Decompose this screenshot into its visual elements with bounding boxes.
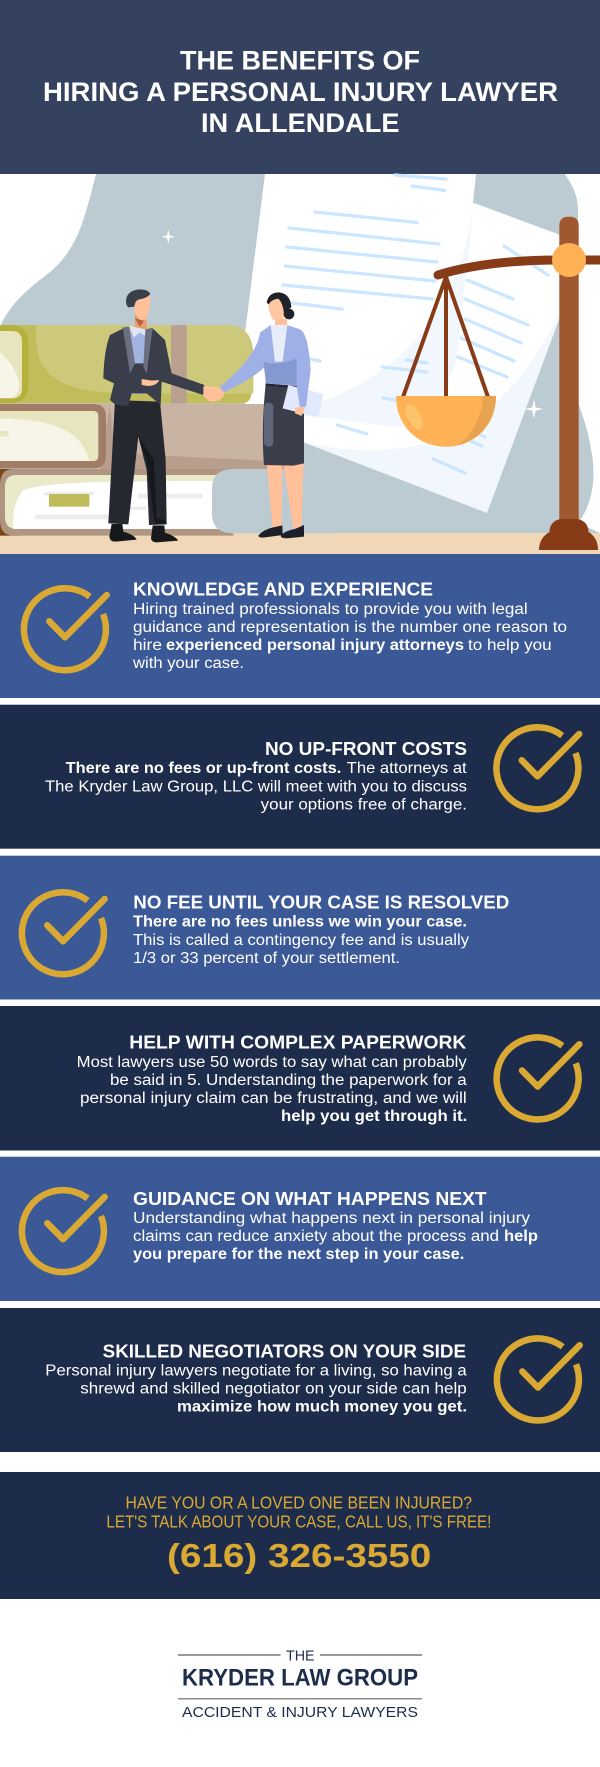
- man in suit: [103, 289, 204, 542]
- woman with clipboard: [220, 292, 323, 538]
- panel: no fee until resolved: [0, 856, 600, 1000]
- stack of books: [0, 325, 333, 536]
- floor: [0, 533, 600, 554]
- text block: Understanding what happens next in personal injury: [133, 1210, 530, 1227]
- olive book: [0, 325, 253, 403]
- icon: check circle: [22, 1190, 105, 1272]
- text block: be said in 5. Understanding the paperwork for a: [110, 1072, 467, 1089]
- text block: you prepare for the next step in your case.: [133, 1246, 464, 1263]
- call to action text: LET'S TALK ABOUT YOUR CASE, CALL US, IT'S FREE!: [106, 1511, 491, 1531]
- text block: claims can reduce anxiety about the process and: [133, 1228, 499, 1245]
- text block: Hiring trained professionals to provide you with legal: [133, 601, 528, 618]
- logo: Kryder Law Group: [178, 1648, 422, 1721]
- call to action text: HAVE YOU OR A LOVED ONE BEEN INJURED?: [126, 1493, 472, 1513]
- title: [43, 46, 558, 138]
- background blob: [0, 174, 600, 533]
- text block: There are no fees or up-front costs.: [66, 760, 341, 777]
- icon: check circle: [496, 727, 579, 809]
- panel: help with complex paperwork: [0, 1006, 600, 1150]
- text block: experienced personal injury attorneys: [166, 637, 464, 654]
- heading: NO UP-FRONT COSTS: [265, 738, 467, 759]
- scale pan: [396, 396, 496, 447]
- text block: with your case.: [132, 655, 244, 672]
- icon: check circle: [24, 588, 107, 670]
- panel: skilled negotiators: [0, 1308, 600, 1452]
- text block: There are no fees unless we win your case.: [133, 914, 467, 931]
- title: HIRING A PERSONAL INJURY LAWYER: [43, 77, 558, 107]
- logo: Kryder Law Group: THE: [286, 1648, 315, 1664]
- tan book: [0, 404, 287, 468]
- text block: personal injury claim can be frustrating, and we will: [80, 1090, 467, 1107]
- scale of justice: [396, 217, 600, 550]
- text block: Personal injury lawyers negotiate for a living, so having a: [45, 1363, 467, 1380]
- call to action text: [106, 1493, 491, 1531]
- illustration: lawyer handshake with books, papers and scale: [0, 174, 600, 554]
- icon: check circle: [497, 1338, 580, 1420]
- header banner: [0, 0, 600, 174]
- text block: Most lawyers use 50 words to say what can probably: [77, 1054, 467, 1071]
- text block: shrewd and skilled negotiator on your side can help: [80, 1381, 467, 1398]
- text block: [133, 1210, 538, 1263]
- text block: [132, 601, 567, 672]
- panel: call to action: [0, 1472, 600, 1599]
- text block: [133, 914, 469, 967]
- heading: SKILLED NEGOTIATORS ON YOUR SIDE: [103, 1341, 466, 1362]
- text block: guidance and representation is the number one reason to: [133, 619, 567, 636]
- text block: This is called a contingency fee and is usually: [133, 932, 469, 949]
- title: IN ALLENDALE: [201, 108, 400, 138]
- text block: maximize how much money you get.: [177, 1399, 467, 1416]
- heading: KNOWLEDGE AND EXPERIENCE: [133, 579, 433, 600]
- text block: hire: [133, 637, 162, 654]
- title: THE BENEFITS OF: [180, 46, 420, 76]
- text block: 1/3 or 33 percent of your settlement.: [133, 950, 400, 967]
- icon: sparkles: [161, 230, 544, 419]
- text block: your options free of charge.: [261, 797, 467, 814]
- text block: help: [504, 1228, 538, 1245]
- phone number: (616) 326-3550: [167, 1537, 431, 1574]
- paper sheets: [240, 174, 560, 513]
- panel: guidance on what happens next: [0, 1157, 600, 1301]
- text block: help you get through it.: [281, 1108, 467, 1125]
- text block: The Kryder Law Group, LLC will meet with you to discuss: [45, 778, 467, 795]
- handshake: [203, 386, 225, 402]
- text block: [45, 1363, 467, 1416]
- logo: Kryder Law Group: ACCIDENT & INJURY LAWYERS: [182, 1704, 418, 1721]
- logo: Kryder Law Group: KRYDER LAW GROUP: [182, 1665, 418, 1691]
- panel: knowledge and experience: [0, 554, 600, 698]
- text block: [77, 1054, 467, 1125]
- panel: no up-front costs: [0, 705, 600, 849]
- text block: The attorneys at: [347, 760, 467, 777]
- icon: check circle: [22, 892, 105, 974]
- heading: HELP WITH COMPLEX PAPERWORK: [129, 1032, 467, 1053]
- icon: check circle: [497, 1037, 579, 1119]
- heading: GUIDANCE ON WHAT HAPPENS NEXT: [133, 1188, 487, 1209]
- text block: [45, 760, 467, 814]
- bottom book: [0, 469, 19, 536]
- heading: NO FEE UNTIL YOUR CASE IS RESOLVED: [133, 892, 509, 913]
- text block: to help you: [468, 637, 552, 654]
